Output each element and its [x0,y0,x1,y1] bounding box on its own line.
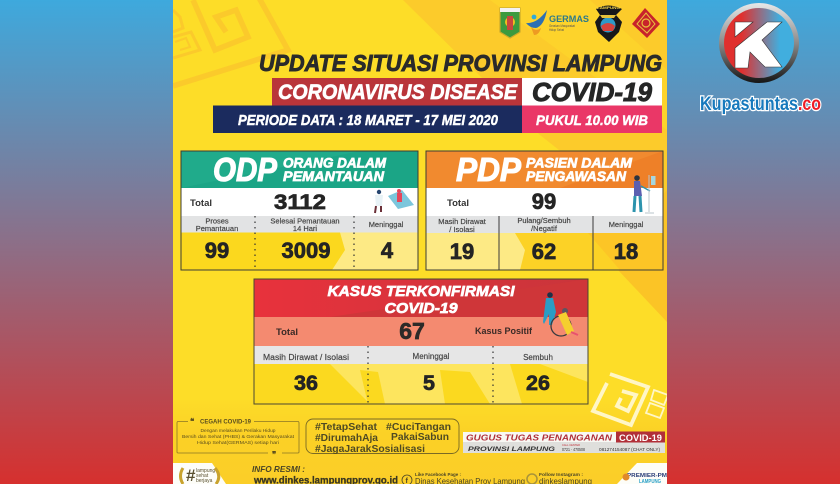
logo: lampung sehat berjaya: lampung [196,468,215,474]
logo: Kupastuntas emblem [719,3,799,83]
ODP total row: Total [190,198,212,209]
logo: lampung sehat berjaya: berjaya [196,478,213,484]
banner: gugus tugas: CALL CENTER [562,443,580,447]
panel: PDP [426,151,663,270]
ODP labels row: Meninggal [369,220,404,229]
ODP header: PEMANTAUAN [283,169,384,184]
PDP header [426,151,663,188]
decorative spiral top-left [173,0,288,86]
Kasus labels row: Meninggal [413,352,450,361]
banner: coronavirus disease: CORONAVIRUS DISEASE [278,80,518,104]
Kasus labels row [254,346,588,364]
callout: cegah covid-19: CEGAH COVID-19 [200,420,252,426]
icon: patient with IV stand [634,175,656,213]
PDP values row: 18 [614,239,638,264]
Kasus values row [254,364,588,404]
ODP labels row: 14 Hari [293,224,317,233]
Kasus total row: Kasus Positif [475,326,533,336]
Kasus values row: 26 [526,371,550,395]
banner: periode data: PERIODE DATA : 18 MARET - 17 MEI 2020 [238,113,498,129]
callout: cegah covid-19: Hidup Sehat(GERMAS) setiap hari [197,440,279,445]
poster background [173,0,667,484]
ODP total row [181,188,418,216]
PDP header: PENGAWASAN [526,169,626,184]
hashtags box: #CuciTangan [386,421,451,433]
ODP header: ODP [213,151,278,188]
Kasus header: COVID-19 [384,300,458,317]
logo: Germas [526,10,589,35]
PDP total row: 99 [532,189,556,214]
ODP header: ORANG DALAM [283,156,387,170]
panel: Kasus Terkonfirmasi [254,279,588,404]
hashtags box: #TetapSehat [315,421,377,433]
PDP values row [426,233,663,270]
logo: lampung sehat berjaya [173,463,226,484]
icon: letter K [735,22,782,68]
ODP labels row [181,216,418,233]
banner: gugus tugas: GUGUS TUGAS PENANGANAN [466,434,612,442]
Kasus values row: 36 [294,371,318,395]
logo: Germas: GERMAS [549,14,589,25]
PDP labels row: / Isolasi [449,225,475,234]
ODP values row: 3009 [282,238,330,263]
logo: lampung sehat berjaya: sehat [196,473,209,479]
logo: Korem [632,8,660,38]
hashtags box: #JagaJarakSosialisasi [315,443,425,455]
PDP header: PASIEN DALAM [526,156,633,170]
banner: covid-19: COVID-19 [532,77,653,107]
ODP labels row: Proses [205,216,229,226]
PDP labels row: Meninggal [609,220,644,229]
callout: cegah covid-19: ❞ [272,450,276,459]
ODP values row [181,232,418,270]
banner: gugus tugas [463,432,665,453]
PDP values row: 19 [450,239,474,264]
callout: cegah covid-19: Bersih dan Sehat (PHBS) & Gerakan Masyarakat [182,434,295,439]
banner: gugus tugas: COVID-19 [619,433,662,444]
title: UPDATE SITUASI PROVINSI LAMPUNG [259,50,662,76]
ODP values row: 4 [381,238,394,263]
decorative spiral bottom-right [593,374,668,425]
hashtags box: PakaiSabun [391,431,449,443]
facebook [402,472,525,484]
info resmi [252,464,398,484]
banner: periode data [213,106,522,133]
Kasus header: KASUS TERKONFIRMASI [328,283,515,300]
Kasus total row [254,317,588,346]
ODP labels row: Selesai Pemantauan [270,216,340,226]
logo: provinsi lampung: PREMIER-PM [627,473,667,479]
PDP total row: Total [447,198,469,209]
logo: Polda Lampung [595,5,622,42]
icon: doctor and patient [375,189,414,213]
PDP total row [426,188,663,216]
Kasus header [254,279,588,317]
callout: cegah covid-19: Dengan melakukan Perilaku Hidup [200,428,276,433]
PDP labels row: Masih Dirawat [438,217,487,226]
banner: gugus tugas: 0721 - 470508 [562,447,586,452]
ODP header [181,151,418,188]
logo: Kupastuntas wordmark: .co [798,94,821,115]
logo: Kupastuntas wordmark: Kupastuntas [700,94,798,115]
banner: pukul: PUKUL 10.00 WIB [536,112,648,128]
logo: Lampung province [500,8,520,38]
logo: Germas: Hidup Sehat [549,28,564,32]
logo: Polda Lampung: LAMPUNG [597,5,620,10]
callout: cegah covid-19: ❝ [190,417,195,426]
PDP labels row [426,216,663,234]
info resmi: INFO RESMI : [252,464,305,474]
hashtags box: #DirumahAja [315,432,378,444]
panel: ODP [181,151,418,270]
Kasus labels row: Masih Dirawat / Isolasi [263,353,349,362]
callout: cegah covid-19 [177,417,299,459]
ODP labels row: Pemantauan [196,224,238,233]
Kasus total row: Total [276,327,298,338]
banner: pukul [522,106,662,133]
PDP values row: 62 [532,239,556,264]
logo: provinsi lampung [617,463,667,484]
ODP total row: 3112 [274,190,326,214]
Kasus total row: 67 [399,318,425,344]
PDP header: PDP [456,151,522,188]
instagram: Follow Instagram : [539,472,584,477]
PDP labels row: Pulang/Sembuh [517,216,571,225]
instagram [527,472,592,484]
facebook: Like Facebook Page : [415,472,462,477]
ODP values row: 99 [205,238,229,263]
banner: gugus tugas: 081274154087 (CHAT ONLY) [599,447,661,452]
Kasus labels row: Sembuh [523,353,553,362]
banner: gugus tugas: PROVINSI LAMPUNG [468,446,555,453]
icon: medic pushing wheelchair [543,292,578,336]
logo: Germas: Gerakan Masyarakat [549,24,575,28]
PDP labels row: /Negatif [531,224,558,233]
hashtags box [306,419,459,455]
Kasus values row: 5 [423,371,435,395]
